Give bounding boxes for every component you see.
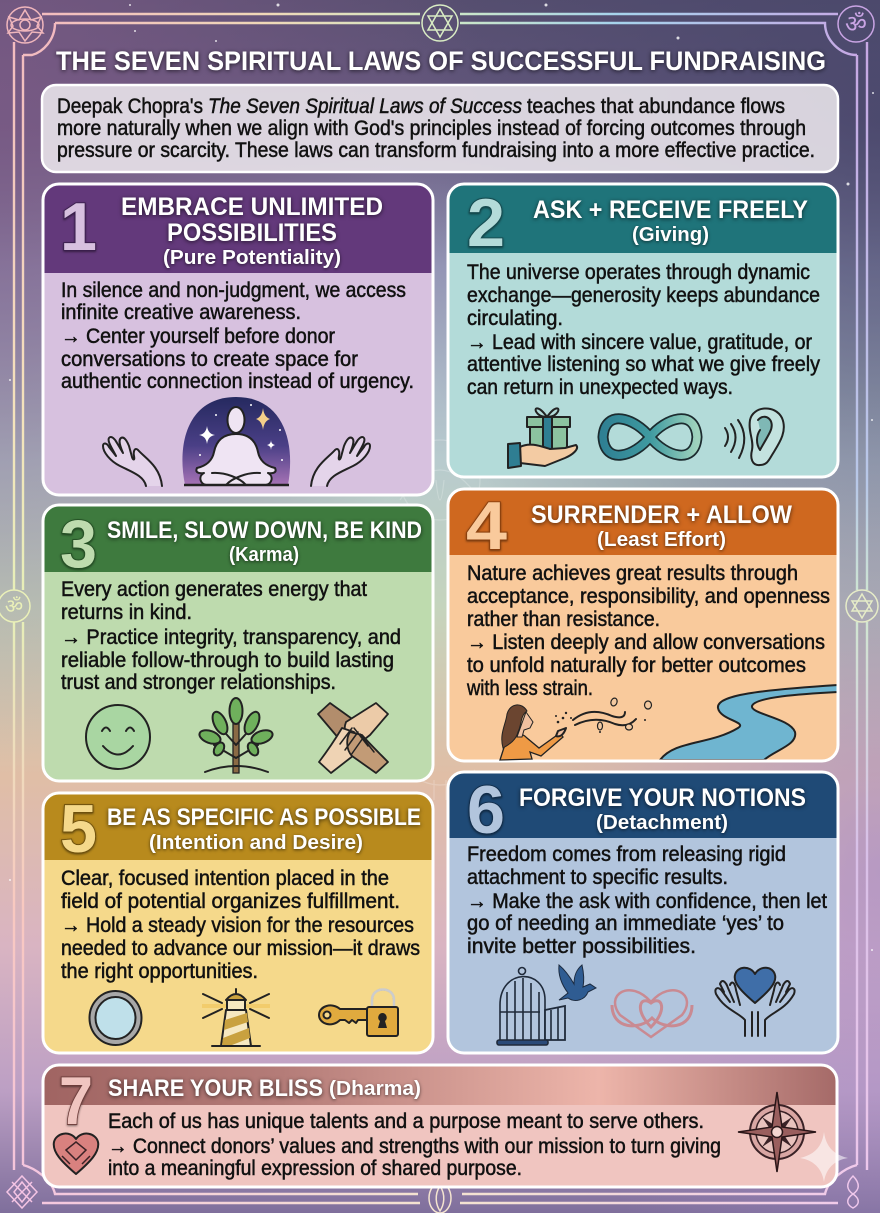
- icon: open birdcage: [497, 968, 565, 1045]
- heading 6: FORGIVE YOUR NOTIONS: [519, 784, 806, 812]
- icon: joined hands: [318, 703, 388, 773]
- heading 4: SURRENDER + ALLOW: [531, 501, 792, 529]
- title: THE SEVEN SPIRITUAL LAWS OF SUCCESSFUL FUNDRAISING: [56, 46, 826, 76]
- heading 4: (Least Effort): [597, 529, 726, 551]
- heading 7: SHARE YOUR BLISS: [108, 1075, 323, 1102]
- text 6: [467, 843, 827, 958]
- text 4: [466, 562, 830, 700]
- text 6: attachment to specific results.: [467, 866, 728, 889]
- icon: flying bird: [559, 965, 596, 1000]
- heading 4: [531, 501, 792, 551]
- heading 2: ASK + RECEIVE FREELY: [533, 196, 808, 224]
- number 3: 3: [60, 506, 97, 582]
- panel: law 1: [43, 184, 433, 495]
- text 6: Freedom comes from releasing rigid: [467, 843, 786, 866]
- heading 2: (Giving): [632, 224, 709, 246]
- intro panel: more naturally when we align with God's principles instead of forcing outcomes through: [57, 117, 806, 140]
- text 1: → Center yourself before donor: [61, 325, 335, 348]
- panel: law 3: [43, 505, 433, 781]
- icon: flowing river: [660, 685, 838, 760]
- text 7: Each of us has unique talents and a purpose meant to serve others.: [108, 1110, 704, 1133]
- icon: key in padlock: [319, 990, 398, 1036]
- text 5: → Hold a steady vision for the resources: [61, 914, 414, 937]
- text 4: acceptance, responsibility, and openness: [467, 585, 830, 608]
- text 4: with less strain.: [466, 677, 593, 700]
- intro panel: The Seven Spiritual Laws of Success: [208, 95, 522, 118]
- text 3: reliable follow-through to build lasting: [61, 649, 394, 672]
- icon: compass star: [738, 1092, 816, 1172]
- number 2: 2: [467, 185, 505, 261]
- icon: woven heart: [54, 1134, 98, 1174]
- medallion: bottom left knot: [7, 1176, 37, 1208]
- text 3: trust and stronger relationships.: [61, 671, 336, 694]
- icon: open hand right: [311, 437, 370, 486]
- heading 2: [533, 196, 808, 246]
- intro panel: Deepak Chopra's: [57, 95, 203, 118]
- text 2: can return in unexpected ways.: [467, 376, 733, 399]
- number 5: 5: [60, 791, 97, 867]
- heading 7: (Dharma): [329, 1078, 421, 1100]
- text 4: → Listen deeply and allow conversations: [467, 631, 825, 654]
- medallion: right star: [846, 590, 878, 622]
- text 6: → Make the ask with confidence, then let: [467, 890, 827, 913]
- icon: meditating figure: [182, 397, 290, 485]
- icon: growing tree: [198, 698, 274, 773]
- text 5: field of potential organizes fulfillment.: [61, 890, 400, 913]
- panel: law 7: [43, 1063, 848, 1187]
- medallion: left om: ॐ: [5, 594, 23, 618]
- panel: law 4: [448, 488, 838, 761]
- text 2: → Lead with sincere value, gratitude, or: [467, 331, 812, 354]
- heading 6: [519, 784, 806, 834]
- text 4: rather than resistance.: [467, 608, 660, 631]
- icon: mirror: [90, 991, 142, 1045]
- text 2: attentive listening so what we give freely: [467, 353, 820, 376]
- text 5: [61, 867, 420, 983]
- text 7: [108, 1110, 721, 1180]
- heading 1: (Pure Potentiality): [163, 247, 341, 269]
- icon: woman releasing seeds: [500, 697, 652, 760]
- heading 1: POSSIBILITIES: [167, 219, 337, 247]
- icon: hands holding heart: [715, 968, 795, 1036]
- text 7: into a meaningful expression of shared purpose.: [108, 1157, 522, 1180]
- text 1: [61, 279, 414, 393]
- medallion: bottom right knot: [848, 1176, 858, 1208]
- text 2: The universe operates through dynamic: [467, 261, 810, 284]
- icon: interlocked hearts: [612, 990, 692, 1037]
- icon: smiling face: [86, 705, 150, 769]
- text 4: to unfold naturally for better outcomes: [467, 654, 806, 677]
- heading 5: BE AS SPECIFIC AS POSSIBLE: [107, 804, 421, 831]
- icon: infinity loop: [603, 419, 697, 455]
- medallion: top centre star of David: [422, 5, 458, 41]
- text 3: [61, 578, 401, 694]
- text 2: circulating.: [467, 307, 563, 330]
- text 1: conversations to create space for: [61, 348, 358, 371]
- icon: open hand left: [103, 437, 162, 486]
- medallion: left om: [0, 590, 30, 622]
- text 2: exchange—generosity keeps abundance: [467, 284, 820, 307]
- text 6: go of needing an immediate ‘yes’ to: [467, 912, 784, 935]
- number 4: 4: [466, 488, 507, 564]
- text 5: needed to advance our mission—it draws: [61, 937, 420, 960]
- panel: law 2: [448, 184, 838, 477]
- medallion: top right om: ॐ: [845, 10, 867, 38]
- text 3: Every action generates energy that: [61, 578, 367, 601]
- heading 3: SMILE, SLOW DOWN, BE KIND: [107, 517, 422, 544]
- text 2: [467, 261, 820, 399]
- icon: listening ear: [725, 408, 784, 465]
- text 7: → Connect donors’ values and strengths with our mission to turn giving: [108, 1135, 721, 1158]
- heading 5: [107, 804, 421, 854]
- intro panel: teaches that abundance flows: [527, 95, 785, 118]
- panel: law 5: [43, 791, 433, 1053]
- heading 6: (Detachment): [596, 812, 728, 834]
- text 5: Clear, focused intention placed in the: [61, 867, 389, 890]
- intro panel: pressure or scarcity. These laws can transform fundraising into a more effective practice.: [57, 139, 815, 162]
- sparkle: [800, 1132, 848, 1182]
- medallion: top right om: [838, 6, 874, 42]
- text 1: In silence and non-judgment, we access: [61, 279, 406, 302]
- medallion: bottom centre lotus: [429, 1183, 451, 1213]
- heading 1: EMBRACE UNLIMITED: [121, 193, 383, 221]
- text 1: authentic connection instead of urgency.: [61, 370, 414, 393]
- heading 1: [121, 193, 383, 269]
- medallion: top left star: [7, 7, 43, 43]
- text 6: invite better possibilities.: [467, 935, 696, 958]
- icon: lighthouse: [202, 989, 270, 1046]
- text 3: returns in kind.: [61, 601, 192, 624]
- panel: law 6: [448, 772, 838, 1053]
- heading 3: (Karma): [229, 544, 299, 566]
- intro panel: [42, 85, 838, 172]
- text 1: infinite creative awareness.: [61, 301, 301, 324]
- number 7: 7: [59, 1063, 93, 1139]
- text 5: the right opportunities.: [61, 960, 258, 983]
- heading 5: (Intention and Desire): [149, 832, 363, 854]
- text 3: → Practice integrity, transparency, and: [61, 626, 401, 649]
- number 6: 6: [467, 772, 505, 848]
- heading 3: [107, 517, 422, 566]
- text 4: Nature achieves great results through: [467, 562, 798, 585]
- icon: gift on hand: [508, 408, 577, 468]
- number 1: 1: [60, 189, 97, 265]
